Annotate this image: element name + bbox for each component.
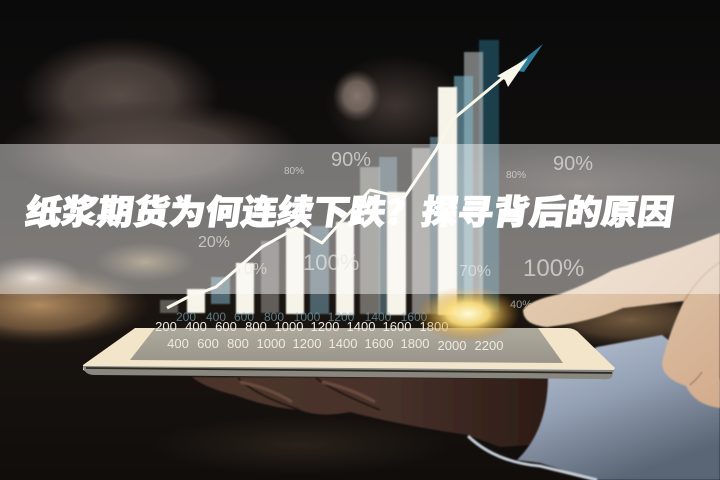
percent labels: 80%: [506, 170, 526, 181]
title: 纸浆期货为何连续下跌？探寻背后的原因: [23, 193, 676, 232]
axis row 3: 2200: [475, 338, 503, 353]
axis row 2: 200: [155, 319, 177, 334]
light glow: [416, 286, 520, 342]
back bars: [160, 40, 499, 314]
axis row 2: 800: [245, 319, 267, 334]
chart bars: [160, 40, 499, 315]
axis row 1: 400: [206, 310, 226, 324]
axis row 2: 1400: [347, 319, 375, 334]
percent labels: 90%: [331, 149, 371, 171]
axis row 3: 1400: [329, 336, 357, 351]
axis row 1: 1200: [328, 310, 355, 324]
axis row 3: 1200: [293, 336, 321, 351]
axis row 3: 1000: [257, 336, 285, 351]
axis row 1: 800: [264, 310, 284, 324]
axis row 2: 600: [215, 319, 237, 334]
axis row 1: 600: [234, 310, 254, 324]
axis row 1: 1000: [294, 310, 321, 324]
percent labels: 100%: [523, 255, 584, 282]
rising trend arrow: [167, 44, 543, 308]
percent labels: 100%: [303, 250, 359, 275]
axis row 1: [176, 310, 428, 324]
axis row 2: [155, 319, 448, 334]
percent labels: 70%: [235, 261, 267, 278]
axis labels: [155, 310, 503, 353]
axis row 1: 1600: [401, 310, 428, 324]
axis row 1: 1400: [365, 310, 392, 324]
pointing hand: [523, 233, 720, 408]
axis row 2: 400: [185, 319, 207, 334]
axis row 2: 1200: [311, 319, 339, 334]
percent labels: 90%: [553, 153, 593, 175]
axis row 1: 200: [176, 310, 196, 324]
axis row 3: 1600: [365, 336, 393, 351]
axis row 3: 1800: [401, 336, 429, 351]
shirt sleeve: [468, 335, 720, 480]
holding hand: [192, 377, 550, 447]
front white bars: [187, 87, 457, 315]
percent labels: 70%: [459, 263, 491, 280]
axis row 2: 1800: [420, 319, 448, 334]
axis row 2: 1000: [275, 319, 303, 334]
percent labels: 20%: [198, 234, 230, 251]
axis row 3: 400: [167, 336, 189, 351]
percent labels: 40%: [510, 299, 532, 311]
axis row 3: [167, 336, 503, 353]
axis row 3: 2000: [438, 338, 466, 353]
percent labels: [198, 149, 593, 311]
axis row 3: 600: [197, 336, 219, 351]
axis row 2: 1600: [383, 319, 411, 334]
percent labels: 80%: [284, 166, 304, 177]
axis row 3: 800: [227, 336, 249, 351]
translucent title band: [0, 144, 720, 294]
tablet: [83, 328, 615, 379]
